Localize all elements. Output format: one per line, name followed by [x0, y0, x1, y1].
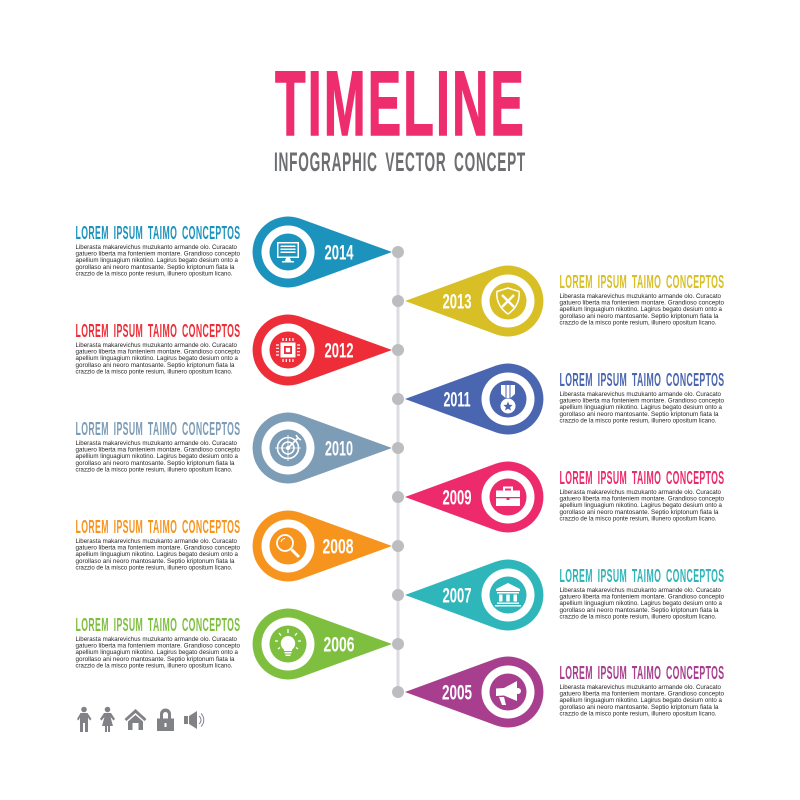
- pin: 2014: [253, 216, 392, 288]
- text: 2011: [560, 370, 724, 424]
- text: 2010: gorollaso ani neoro mantosante. Septio kriptonum fiata la: [76, 460, 235, 467]
- icon: magnifier: [277, 535, 299, 557]
- text: 2014: gatuero liberta ma fonteniem montare. Grandioso concepto: [76, 251, 240, 258]
- panel: 2012: LOREM IPSUM TAIMO CONCEPTOS: [76, 321, 240, 341]
- text: 2007: [560, 566, 724, 620]
- icon: megaphone: [496, 681, 521, 705]
- text: 2005: Liberasta makarevichus muzukanto armande olo. Curacato: [560, 684, 721, 691]
- text: 2005: apellium linguagium nikotino. Lagirus begato desium onto a: [560, 697, 722, 704]
- text: 2014: [76, 223, 240, 277]
- text: 2006: crazzio de la misco ponte resium, illunero opositum licano.: [76, 662, 233, 669]
- text: 2006: gorollaso ani neoro mantosante. Septio kriptonum fiata la: [76, 656, 235, 663]
- text: 2011: Liberasta makarevichus muzukanto armande olo. Curacato: [560, 391, 721, 398]
- icon: man: [77, 707, 92, 732]
- pin: 2010: [253, 412, 392, 484]
- pin: 2005: [405, 656, 543, 728]
- subtitle: INFOGRAPHIC VECTOR CONCEPT: [274, 147, 526, 177]
- bottom icon row: [77, 707, 204, 732]
- text: 2013: [560, 272, 724, 326]
- pin: 2010: 2010: [325, 438, 353, 460]
- pin: 2007: 2007: [442, 584, 472, 608]
- panel: 2006: LOREM IPSUM TAIMO CONCEPTOS: [76, 615, 240, 635]
- text: 2005: crazzio de la misco ponte resium, illunero opositum licano.: [560, 710, 717, 717]
- text: 2010: Liberasta makarevichus muzukanto armande olo. Curacato: [76, 440, 237, 447]
- icon: woman: [100, 707, 115, 732]
- pin: 2012: [253, 314, 392, 386]
- text: 2006: Liberasta makarevichus muzukanto armande olo. Curacato: [76, 636, 237, 643]
- text: 2009: Liberasta makarevichus muzukanto armande olo. Curacato: [560, 489, 721, 496]
- text: 2007: gatuero liberta ma fonteniem montare. Grandioso concepto: [560, 594, 724, 601]
- pin: 2013: [405, 266, 543, 336]
- text: 2005: [560, 663, 724, 717]
- text: 2010: gatuero liberta ma fonteniem montare. Grandioso concepto: [76, 447, 240, 454]
- panel: 2008: [76, 510, 392, 582]
- pin: 2007: [405, 560, 543, 630]
- text: 2010: crazzio de la misco ponte resium, illunero opositum licano.: [76, 466, 233, 473]
- text: 2010: apellium linguagium nikotino. Lagirus begato desium onto a: [76, 453, 238, 460]
- timeline dots: [392, 246, 404, 698]
- pin: 2013: 2013: [442, 290, 472, 314]
- text: 2008: apellium linguagium nikotino. Lagirus begato desium onto a: [76, 551, 238, 558]
- text: 2012: Liberasta makarevichus muzukanto armande olo. Curacato: [76, 342, 237, 349]
- icon: light bulb: [275, 629, 301, 656]
- text: 2005: gorollaso ani neoro mantosante. Septio kriptonum fiata la: [560, 704, 719, 711]
- pin: 2005: 2005: [442, 682, 472, 704]
- pin: 2008: [253, 510, 392, 582]
- pin: 2014: 2014: [324, 242, 354, 264]
- pin: 2009: [405, 462, 543, 532]
- pin: 2006: [253, 608, 392, 680]
- icon: medal: [500, 385, 516, 414]
- panel: 2012: [76, 314, 392, 386]
- icon: monitor: [277, 242, 299, 262]
- text: 2012: apellium linguagium nikotino. Lagirus begato desium onto a: [76, 355, 238, 362]
- text: 2009: gatuero liberta ma fonteniem montare. Grandioso concepto: [560, 496, 724, 503]
- panel: 2005: [405, 656, 724, 728]
- pin: 2011: [405, 364, 543, 434]
- text: 2013: gorollaso ani neoro mantosante. Septio kriptonum fiata la: [560, 313, 719, 320]
- text: 2008: [76, 517, 240, 571]
- text: 2009: crazzio de la misco ponte resium, illunero opositum licano.: [560, 515, 717, 522]
- text: 2007: gorollaso ani neoro mantosante. Septio kriptonum fiata la: [560, 607, 719, 614]
- text: 2014: apellium linguagium nikotino. Lagirus begato desium onto a: [76, 257, 238, 264]
- text: 2012: gorollaso ani neoro mantosante. Septio kriptonum fiata la: [76, 362, 235, 369]
- text: 2006: [76, 615, 240, 669]
- text: 2007: apellium linguagium nikotino. Lagirus begato desium onto a: [560, 600, 722, 607]
- text: 2011: apellium linguagium nikotino. Lagirus begato desium onto a: [560, 404, 722, 411]
- pin: 2008: 2008: [322, 536, 354, 558]
- text: 2007: crazzio de la misco ponte resium, illunero opositum licano.: [560, 613, 717, 620]
- icon: shield: [497, 288, 519, 314]
- text: 2005: gatuero liberta ma fonteniem montare. Grandioso concepto: [560, 691, 724, 698]
- panel: 2008: LOREM IPSUM TAIMO CONCEPTOS: [76, 517, 240, 537]
- text: 2012: crazzio de la misco ponte resium, illunero opositum licano.: [76, 368, 233, 375]
- pin: 2009: 2009: [442, 486, 472, 510]
- text: 2008: Liberasta makarevichus muzukanto armande olo. Curacato: [76, 538, 237, 545]
- text: 2013: gatuero liberta ma fonteniem montare. Grandioso concepto: [560, 300, 724, 307]
- text: 2014: Liberasta makarevichus muzukanto armande olo. Curacato: [76, 244, 237, 251]
- text: 2009: [560, 468, 724, 522]
- timeline spine: [396, 252, 400, 692]
- pin: 2012: 2012: [324, 340, 354, 362]
- panel: 2014: LOREM IPSUM TAIMO CONCEPTOS: [76, 223, 240, 243]
- text: 2012: [76, 321, 240, 375]
- text: 2014: crazzio de la misco ponte resium, illunero opositum licano.: [76, 270, 233, 277]
- icon: target: [275, 435, 301, 461]
- text: 2008: gorollaso ani neoro mantosante. Septio kriptonum fiata la: [76, 558, 235, 565]
- text: 2009: apellium linguagium nikotino. Lagirus begato desium onto a: [560, 502, 722, 509]
- icon: speaker: [184, 711, 204, 729]
- panel: 2010: LOREM IPSUM TAIMO CONCEPTOS: [76, 419, 240, 439]
- text: 2008: crazzio de la misco ponte resium, illunero opositum licano.: [76, 564, 233, 571]
- text: 2006: apellium linguagium nikotino. Lagirus begato desium onto a: [76, 649, 238, 656]
- text: 2008: gatuero liberta ma fonteniem montare. Grandioso concepto: [76, 545, 240, 552]
- panel: 2010: [76, 412, 392, 484]
- text: 2009: gorollaso ani neoro mantosante. Septio kriptonum fiata la: [560, 509, 719, 516]
- text: 2011: gatuero liberta ma fonteniem montare. Grandioso concepto: [560, 398, 724, 405]
- panel: 2013: [405, 266, 724, 336]
- icon: bank: [495, 583, 521, 606]
- text: 2013: Liberasta makarevichus muzukanto armande olo. Curacato: [560, 293, 721, 300]
- text: 2007: Liberasta makarevichus muzukanto armande olo. Curacato: [560, 587, 721, 594]
- pin: 2011: 2011: [444, 388, 471, 412]
- panel: 2014: [76, 216, 392, 288]
- text: 2013: crazzio de la misco ponte resium, illunero opositum licano.: [560, 319, 717, 326]
- panel: 2009: [405, 462, 724, 532]
- panel: 2011: [405, 364, 724, 434]
- text: 2011: crazzio de la misco ponte resium, illunero opositum licano.: [560, 417, 717, 424]
- pin: 2006: 2006: [324, 634, 354, 656]
- icon: lock: [157, 709, 174, 731]
- title: TIMELINE: [275, 53, 526, 155]
- icon: briefcase: [496, 486, 520, 506]
- panel: 2006: [76, 608, 392, 680]
- text: 2012: gatuero liberta ma fonteniem montare. Grandioso concepto: [76, 349, 240, 356]
- text: 2006: gatuero liberta ma fonteniem montare. Grandioso concepto: [76, 643, 240, 650]
- text: 2010: [76, 419, 240, 473]
- text: 2014: gorollaso ani neoro mantosante. Septio kriptonum fiata la: [76, 264, 235, 271]
- icon: microchip: [276, 338, 300, 362]
- text: 2011: gorollaso ani neoro mantosante. Septio kriptonum fiata la: [560, 411, 719, 418]
- panel: 2007: [405, 560, 724, 630]
- text: 2013: apellium linguagium nikotino. Lagirus begato desium onto a: [560, 306, 722, 313]
- icon: house: [124, 709, 146, 730]
